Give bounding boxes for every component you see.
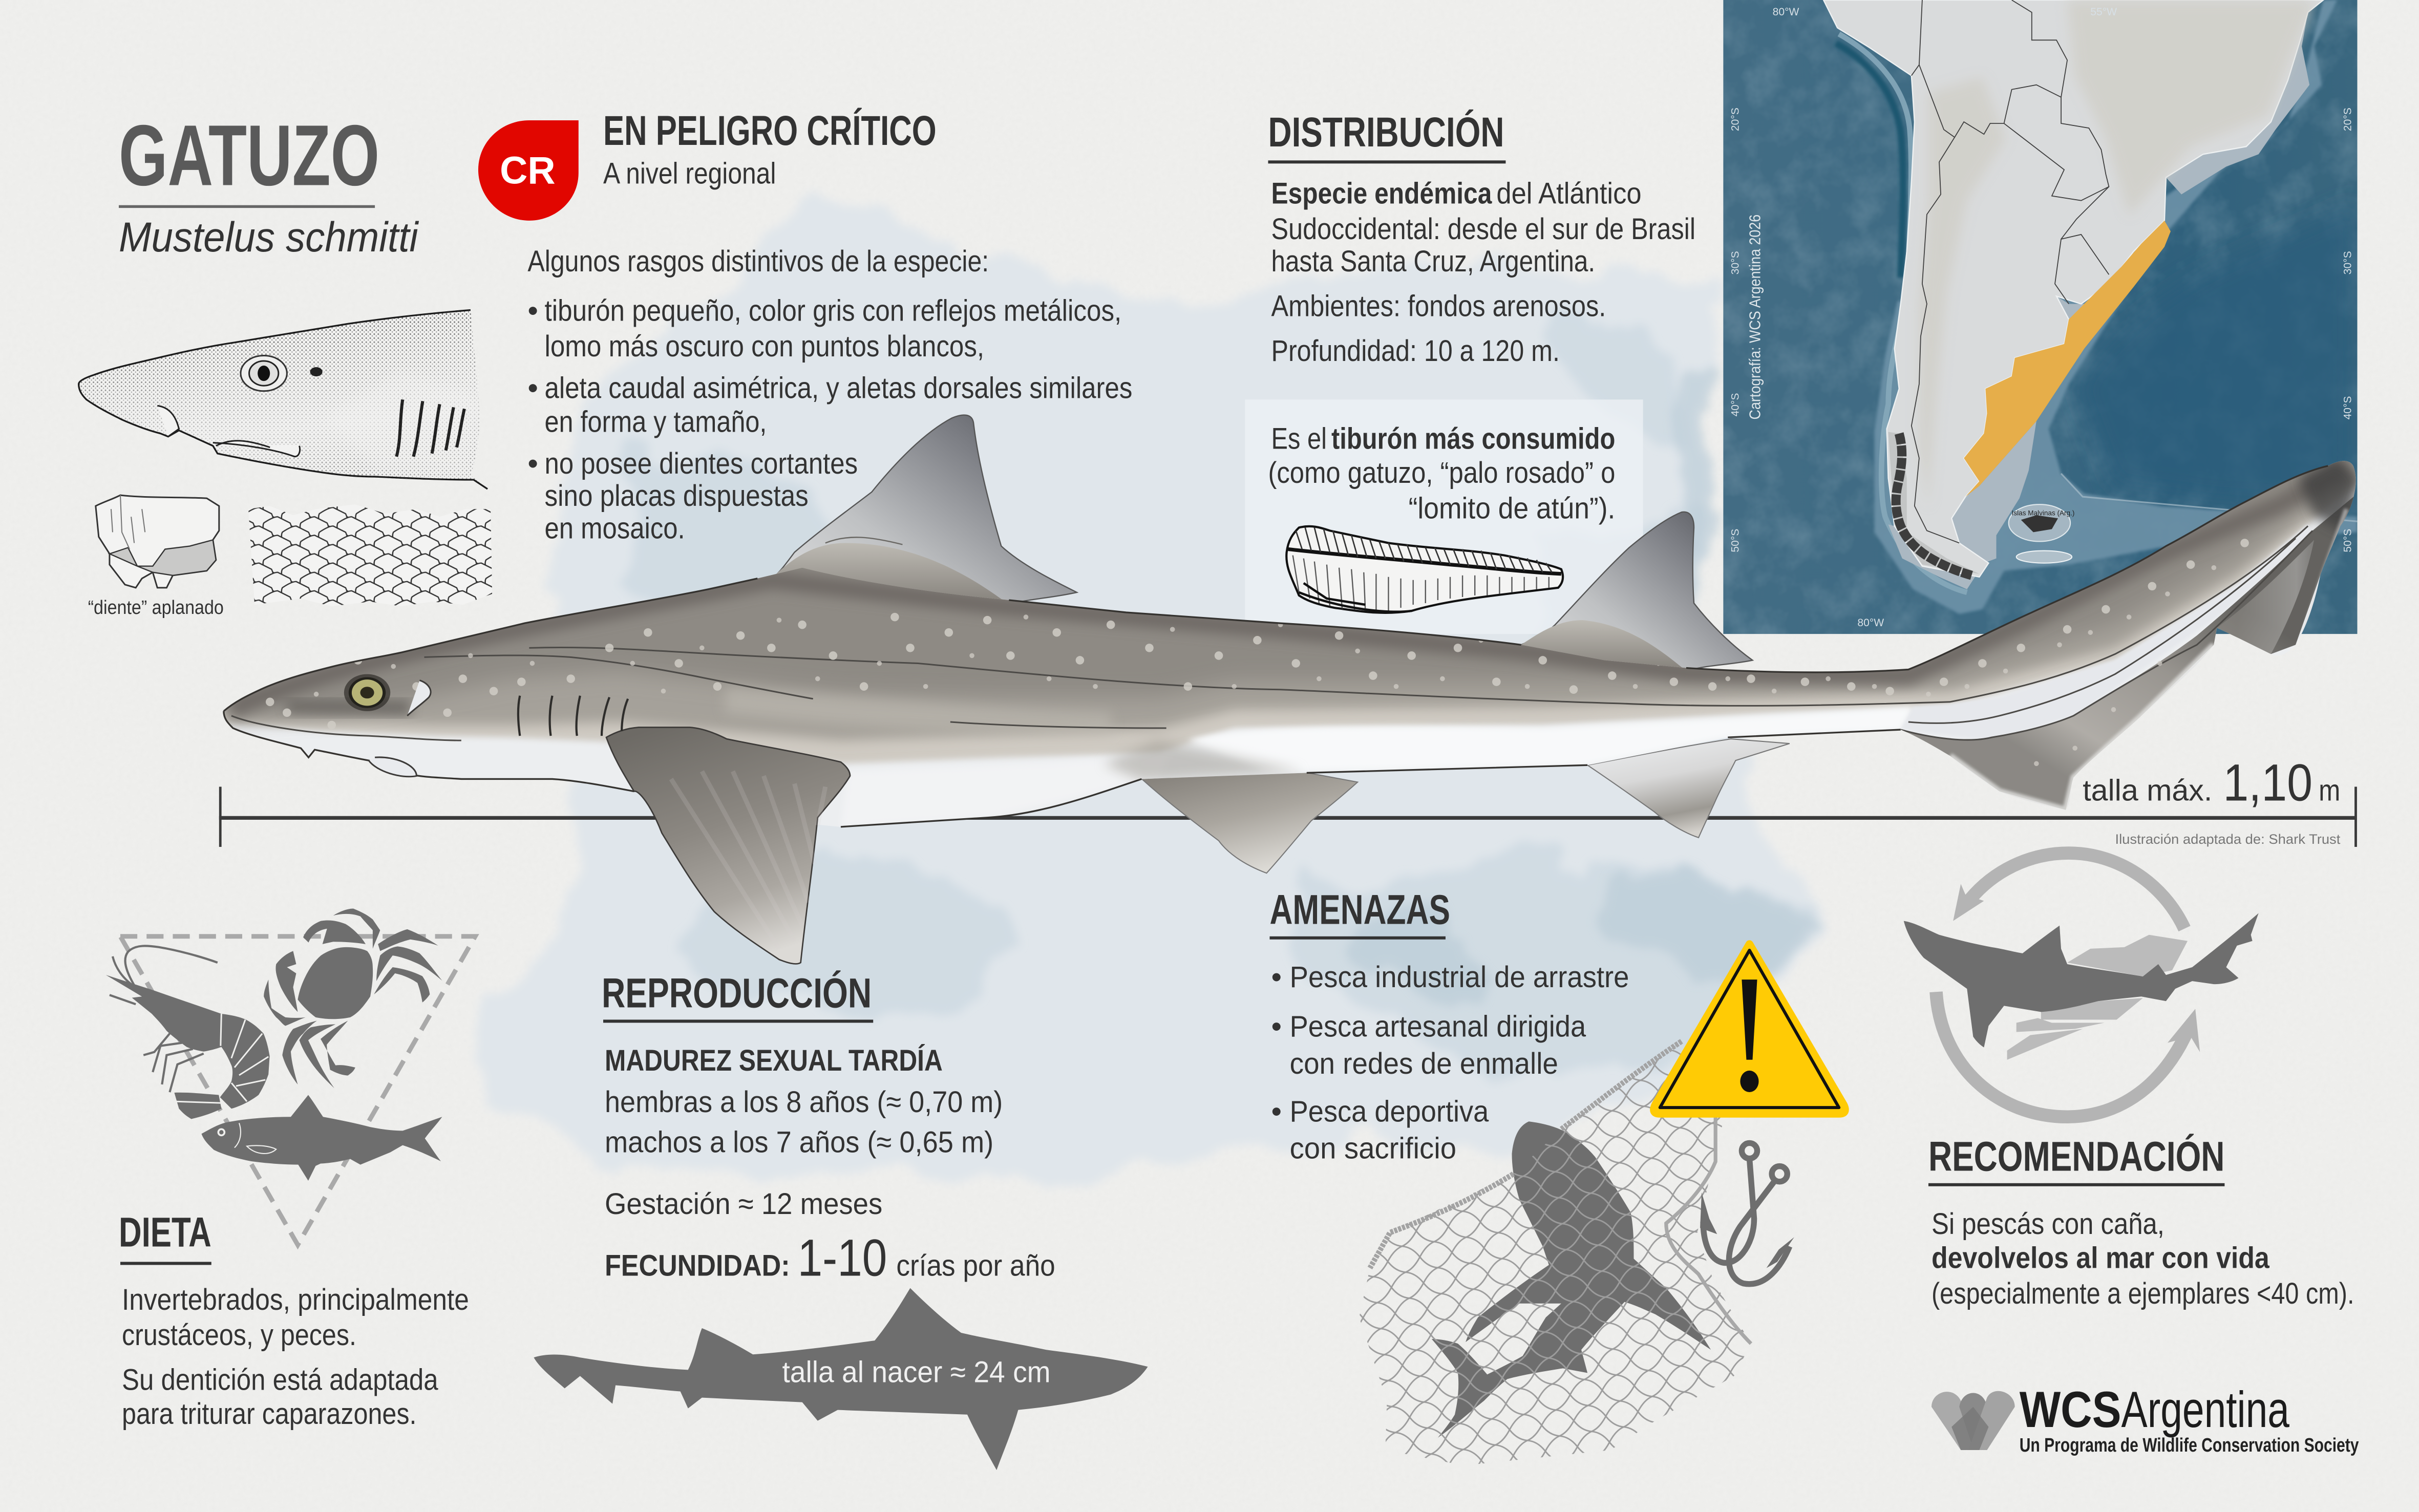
- icon: shrimp: [106, 946, 270, 1119]
- map graticule labels: 80°W: [1857, 617, 1884, 629]
- body outline: [224, 466, 2328, 827]
- text block: recommendation: devolvelos al mar con vida: [1932, 1241, 2270, 1274]
- heading: distribution: DISTRIBUCIÓN: [1268, 109, 1504, 156]
- text block: distribution: Ambientes: fondos arenosos.: [1271, 290, 1606, 323]
- maximum size label: 1,10: [2223, 753, 2312, 812]
- illustration: shark head sketch: [70, 301, 494, 494]
- text block: distribution: Especie endémica: [1271, 177, 1492, 210]
- text block: threats: Pesca deportiva: [1290, 1095, 1489, 1128]
- circular arrows: [1936, 853, 2188, 1117]
- logo: WCS Argentina: Argentina: [2121, 1381, 2289, 1438]
- eye shadow: [287, 700, 410, 716]
- illustration: placoid scale mosaic: [247, 503, 494, 608]
- map graticule labels: 20°S: [2342, 108, 2353, 131]
- text block: recommendation: [1932, 1207, 2354, 1310]
- text block: distinctive traits: •: [527, 371, 538, 404]
- Falkland and Burdwood banks: [2009, 504, 2070, 541]
- country borders: [1912, 0, 2109, 543]
- conservation status heading: EN PELIGRO CRÍTICO: [603, 108, 937, 154]
- caudal white stripe: [1901, 524, 2314, 740]
- text block: distinctive traits: en forma y tamaño,: [545, 406, 767, 439]
- text block: distinctive traits: [527, 245, 1132, 545]
- text block: distribution: Profundidad: 10 a 120 m.: [1271, 334, 1560, 368]
- pelvic fin: [1138, 770, 1357, 873]
- text block: diet: Invertebrados, principalmente: [122, 1283, 469, 1316]
- diet illustration: [106, 909, 475, 1245]
- text block: distinctive traits: no posee dientes cortantes: [545, 447, 858, 480]
- callout: most consumed shark: [1245, 399, 1643, 634]
- callout: most consumed shark: “lomito de atún”).: [1409, 492, 1615, 525]
- caudal lower lobe: [1901, 494, 2357, 810]
- map graticule labels: 80°W: [1773, 6, 1799, 18]
- text block: distinctive traits: en mosaico.: [545, 512, 685, 545]
- heading: threats: [1269, 887, 1450, 940]
- title: Mustelus schmitti: [119, 214, 419, 261]
- map graticule labels: 30°S: [1729, 251, 1741, 274]
- icon: catch and release cycle: [1904, 853, 2259, 1117]
- anal fin: [1587, 739, 1790, 838]
- text block: threats: Pesca industrial de arrastre: [1290, 961, 1629, 994]
- eye: [344, 674, 390, 711]
- icon: CR status badge: CR: [500, 149, 556, 192]
- Patagonian channels: [1896, 434, 1971, 576]
- watercolor wash: [478, 177, 1799, 1181]
- text block: distribution: [1271, 177, 1695, 368]
- map: species distribution: [1723, 0, 2357, 634]
- heading: distribution: [1268, 109, 1505, 163]
- shark: [1904, 913, 2259, 1048]
- text block: reproduction: Gestación ≈ 12 meses: [605, 1187, 882, 1221]
- text block: distinctive traits: •: [527, 447, 538, 480]
- text block: threats: •: [1271, 1095, 1282, 1128]
- white spots: [270, 543, 2245, 725]
- gill slits: [518, 696, 628, 736]
- icon: fishing hook: [1700, 1143, 1794, 1284]
- ventral highlight: [1188, 707, 1913, 771]
- trench along the Pacific coast: [1836, 43, 1903, 278]
- title: GATUZO: [119, 107, 379, 204]
- map graticule labels: Cartografía: WCS Argentina 2026: [1747, 215, 1764, 419]
- maximum size label: m: [2319, 774, 2340, 807]
- text block: reproduction: crías por año: [896, 1249, 1055, 1283]
- first dorsal fin: [767, 415, 1077, 605]
- text block: diet: Su dentición está adaptada: [122, 1364, 438, 1397]
- shark body: [216, 432, 2368, 833]
- credit: illustration source: Ilustración adaptada de: Shark Trust: [2115, 831, 2341, 847]
- text block: threats: Pesca artesanal dirigida: [1290, 1010, 1586, 1044]
- map graticule labels: 30°S: [2342, 251, 2353, 274]
- heading: diet: DIETA: [119, 1209, 211, 1255]
- caption: flattened tooth: “diente” aplanado: [88, 597, 224, 618]
- maximum size label: [2083, 753, 2340, 812]
- map graticule labels: 40°S: [1729, 393, 1741, 416]
- pectoral fin: [606, 728, 850, 964]
- shark silhouette: size at birth: [534, 1288, 1148, 1470]
- illustration: flattened tooth: [96, 495, 219, 588]
- map graticule labels: 50°S: [2342, 529, 2353, 552]
- flank lines: [231, 526, 2312, 740]
- heading: reproduction: REPRODUCCIÓN: [602, 970, 872, 1016]
- second dorsal fin: [1521, 512, 1752, 671]
- callout: most consumed shark: tiburón más consumido: [1331, 422, 1615, 456]
- map graticule labels: [1729, 6, 2353, 629]
- text block: reproduction: [605, 1044, 1055, 1287]
- text block: threats: con sacrificio: [1290, 1132, 1456, 1165]
- text block: reproduction: hembras a los 8 años (≈ 0,70 m): [605, 1085, 1003, 1119]
- text block: diet: [122, 1283, 469, 1431]
- icon: CR status badge: [478, 120, 579, 221]
- main illustration: gatuzo shark: [216, 415, 2368, 964]
- text block: recommendation: Si pescás con caña,: [1932, 1207, 2165, 1241]
- icon: crab: [264, 909, 442, 1088]
- continental shelf (light): [2166, 12, 2309, 195]
- flank light streak: [725, 687, 1111, 735]
- deep basin shading: [2075, 201, 2357, 509]
- callout: most consumed shark: Es el: [1271, 422, 1327, 456]
- illustration: shark caught in net: [1350, 1034, 1767, 1473]
- text block: threats: con redes de enmalle: [1290, 1047, 1558, 1080]
- text block: diet: para triturar caparazones.: [122, 1397, 416, 1431]
- illustration: shark fillet: [1286, 526, 1563, 613]
- text block: reproduction: FECUNDIDAD:: [605, 1249, 790, 1283]
- logo: WCS Argentina: WCS: [2020, 1381, 2121, 1438]
- text block: reproduction: 1-10: [798, 1228, 887, 1287]
- icon: fish: [201, 1095, 442, 1181]
- dashed triangle: [120, 936, 475, 1245]
- text block: distinctive traits: sino placas dispuestas: [545, 479, 809, 513]
- map graticule labels: Islas Malvinas (Arg.): [2012, 509, 2074, 517]
- range: orange distribution area: [1964, 221, 2171, 497]
- shark silhouette: size at birth: talla al nacer ≈ 24 cm: [782, 1355, 1051, 1389]
- text block: threats: •: [1271, 961, 1282, 994]
- conservation status heading: [603, 108, 937, 190]
- heading: recommendation: RECOMENDACIÓN: [1928, 1134, 2224, 1180]
- land mass: [1823, 0, 2323, 577]
- heading: diet: [119, 1209, 211, 1265]
- text block: distinctive traits: tiburón pequeño, color gris con reflejos metálicos,: [545, 294, 1121, 328]
- heading: threats: AMENAZAS: [1269, 887, 1450, 933]
- map graticule labels: 50°S: [1729, 529, 1741, 552]
- caudal tip shading: [2299, 457, 2361, 532]
- transitional shelf: [1874, 0, 2357, 614]
- text block: distinctive traits: lomo más oscuro con puntos blancos,: [545, 330, 984, 363]
- scale line: maximum size: [219, 787, 2357, 847]
- callout: most consumed shark: (como gatuzo, “palo rosado” o: [1268, 456, 1615, 489]
- map graticule labels: 55°W: [2090, 6, 2117, 18]
- text block: reproduction: machos a los 7 años (≈ 0,65 m): [605, 1126, 993, 1159]
- text block: distinctive traits: Algunos rasgos distintivos de la especie:: [527, 245, 989, 278]
- logo: WCS Argentina: [1932, 1381, 2359, 1456]
- text block: reproduction: MADUREZ SEXUAL TARDÍA: [605, 1044, 943, 1077]
- mouth and spiracle: [369, 680, 431, 777]
- text block: threats: •: [1271, 1010, 1282, 1044]
- text block: distribution: Sudoccidental: desde el sur de Brasil: [1271, 212, 1695, 246]
- icon: warning triangle: [1654, 944, 1845, 1114]
- text block: distinctive traits: aleta caudal asimétrica, y aletas dorsales similares: [545, 371, 1132, 404]
- text block: distinctive traits: •: [527, 294, 538, 328]
- text block: distribution: hasta Santa Cruz, Argentina.: [1271, 245, 1595, 278]
- title: [119, 107, 419, 261]
- text block: distribution: del Atlántico: [1496, 177, 1642, 210]
- text block: diet: crustáceos, y peces.: [122, 1318, 356, 1352]
- hand: [2007, 935, 2188, 1060]
- maximum size label: talla máx.: [2083, 774, 2212, 807]
- relief shading on land: [1919, 0, 2314, 509]
- conservation status heading: A nivel regional: [603, 157, 776, 190]
- map graticule labels: 40°S: [2342, 396, 2353, 419]
- text block: threats: [1271, 961, 1629, 1165]
- map graticule labels: 20°S: [1729, 108, 1741, 131]
